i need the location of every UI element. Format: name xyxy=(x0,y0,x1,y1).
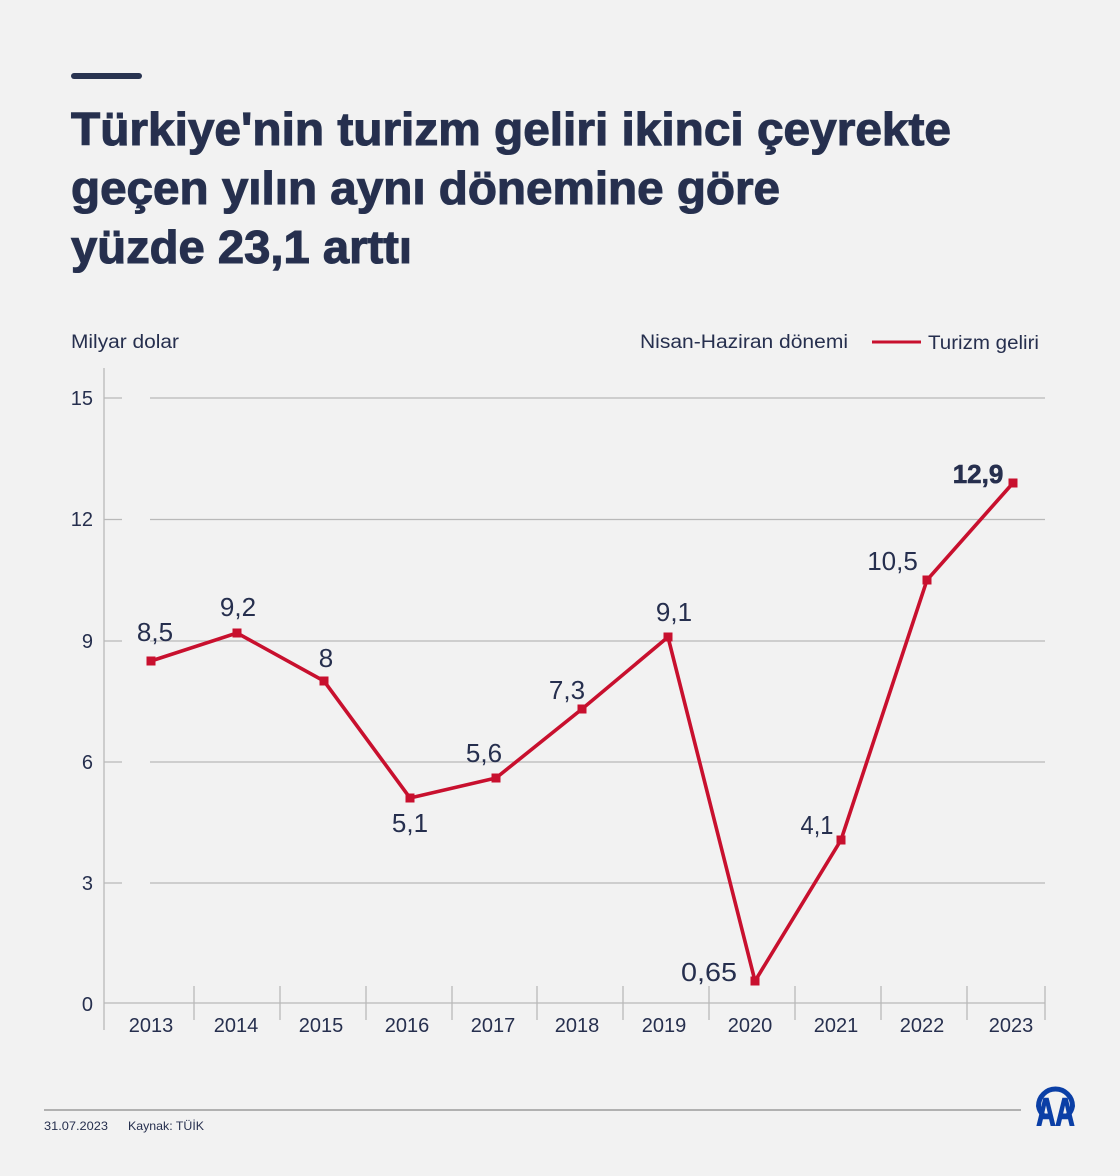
y axis labels: 0 xyxy=(82,994,93,1016)
y axis unit label: Milyar dolar xyxy=(71,332,180,353)
period label: Nisan-Haziran dönemi xyxy=(640,332,848,353)
x axis labels: 2019 xyxy=(642,1015,686,1037)
data value labels xyxy=(137,459,1003,987)
x axis labels: 2022 xyxy=(900,1015,944,1037)
x axis labels: 2017 xyxy=(471,1015,515,1037)
y axis labels: 6 xyxy=(82,752,93,774)
data value labels: 5,1 xyxy=(392,808,428,838)
data value labels: 7,3 xyxy=(549,675,585,705)
x axis labels: 2018 xyxy=(555,1015,599,1037)
chart axes and grid xyxy=(104,368,1045,1030)
y axis labels: 3 xyxy=(82,873,93,895)
legend: Turizm geliri: Turizm geliri xyxy=(928,333,1039,354)
data value labels: 8 xyxy=(319,643,333,673)
line series: Turizm geliri xyxy=(146,478,1018,986)
data value labels: 5,6 xyxy=(466,738,502,768)
x axis labels: 2015 xyxy=(299,1015,343,1037)
y axis labels: 15 xyxy=(71,388,93,410)
data value labels: 0,65 xyxy=(681,957,737,987)
y axis labels xyxy=(71,388,93,1016)
x axis labels: 2016 xyxy=(385,1015,429,1037)
data value labels: 10,5 xyxy=(867,546,918,576)
title xyxy=(71,103,951,273)
x axis labels: 2014 xyxy=(214,1015,258,1037)
title: Türkiye'nin turizm geliri ikinci çeyrekte xyxy=(71,103,951,155)
x axis labels xyxy=(129,1015,1033,1037)
x axis labels: 2020 xyxy=(728,1015,772,1037)
data value labels: 12,9 xyxy=(953,459,1003,489)
title accent bar xyxy=(71,73,142,79)
footer date: 31.07.2023 xyxy=(44,1119,108,1133)
y axis labels: 12 xyxy=(71,509,93,531)
x axis labels: 2021 xyxy=(814,1015,858,1037)
title: geçen yılın aynı dönemine göre xyxy=(71,162,780,214)
data value labels: 9,1 xyxy=(656,597,692,627)
data value labels: 9,2 xyxy=(220,592,256,622)
data value labels: 4,1 xyxy=(800,810,834,840)
icon: AA logo: AA xyxy=(1036,1092,1074,1134)
footer source: Kaynak: TÜİK xyxy=(128,1119,204,1133)
y axis labels: 9 xyxy=(82,631,93,653)
icon: AA logo xyxy=(1036,1089,1074,1134)
x axis labels: 2023 xyxy=(989,1015,1033,1037)
footer rule xyxy=(44,1109,1021,1111)
title: yüzde 23,1 arttı xyxy=(71,221,412,273)
data value labels: 8,5 xyxy=(137,617,173,647)
x axis labels: 2013 xyxy=(129,1015,173,1037)
